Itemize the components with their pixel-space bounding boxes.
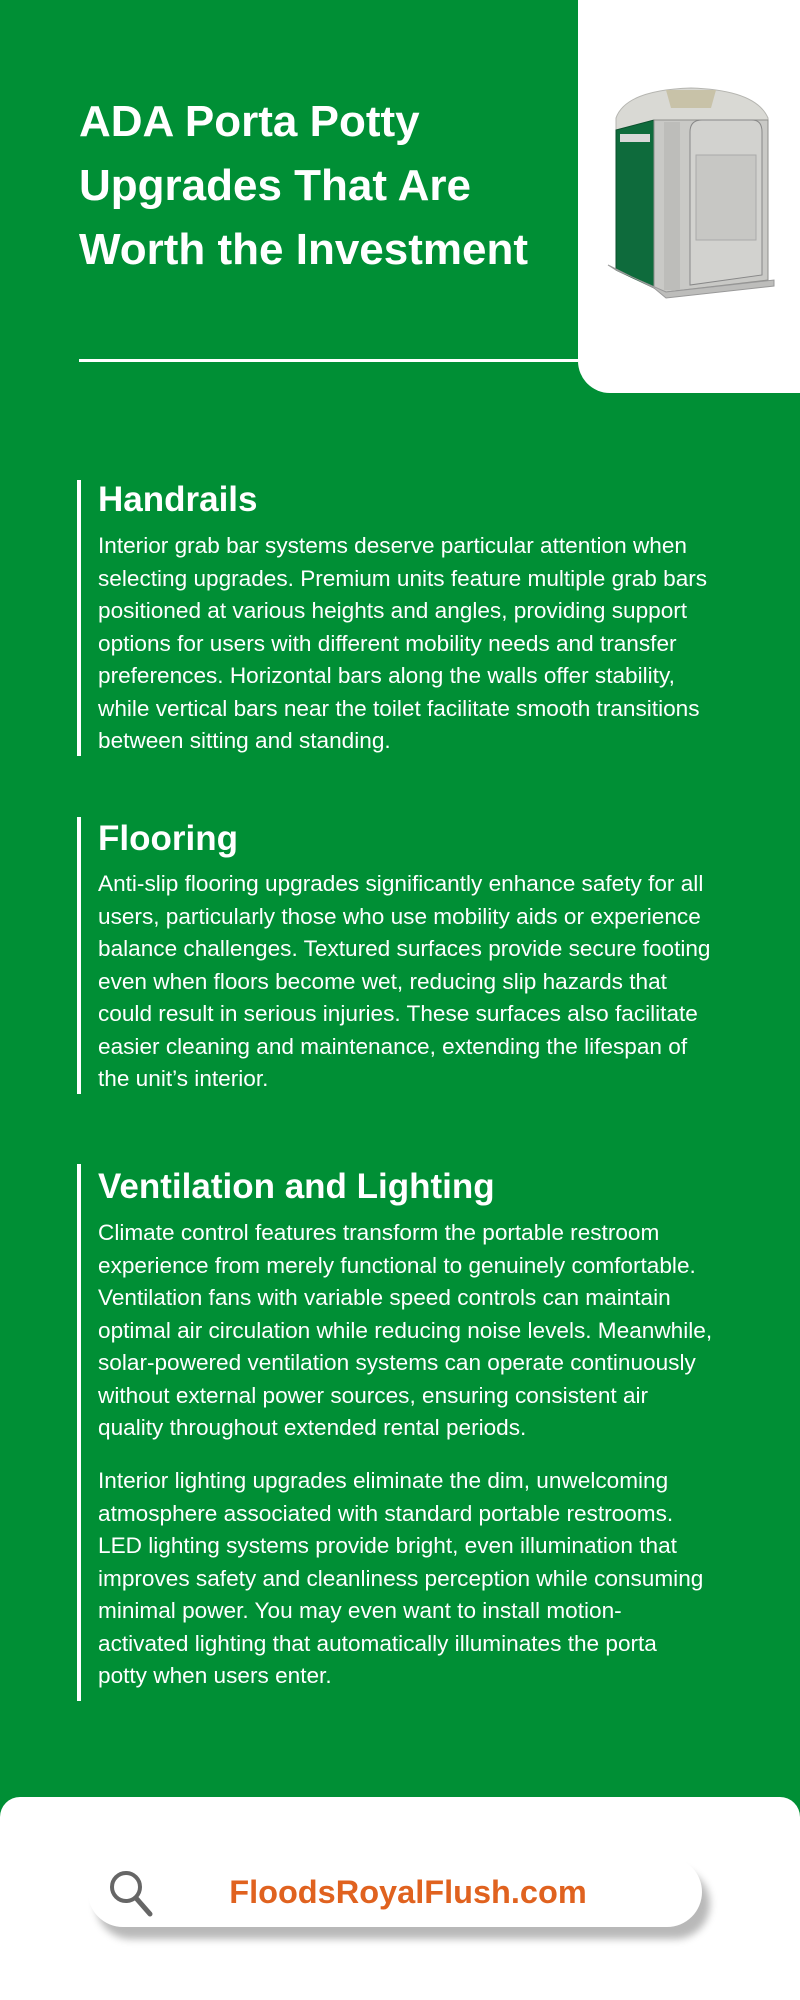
text: handrails body: between sitting and standing. — [98, 728, 391, 753]
text: flooring body: Anti-slip flooring upgrades significantly enhance safety for all — [98, 871, 703, 896]
title — [79, 97, 528, 274]
title: Upgrades That Are — [79, 161, 471, 210]
text: lighting body: atmosphere associated with standard portable restrooms. — [98, 1500, 673, 1526]
title: Worth the Investment — [79, 225, 528, 274]
heading: flooring: Flooring — [98, 819, 238, 858]
text: flooring body — [98, 871, 711, 1091]
text: handrails body: selecting upgrades. Premium units feature multiple grab bars — [98, 566, 707, 590]
text: handrails body: options for users with different mobility needs and transfer — [98, 630, 677, 656]
text: handrails body: positioned at various heights and angles, providing support — [98, 598, 687, 623]
text: lighting body: potty when users enter. — [98, 1663, 332, 1688]
text: handrails body: preferences. Horizontal bars along the walls offer stability, — [98, 663, 675, 688]
heading: ventilation and lighting: Ventilation and Lighting — [98, 1167, 495, 1206]
text: website: FloodsRoyalFlush.com — [229, 1874, 587, 1910]
text: lighting body: Interior lighting upgrades eliminate the dim, unwelcoming — [98, 1468, 668, 1493]
text: flooring body: balance challenges. Textured surfaces provide secure footing — [98, 936, 711, 961]
text: ventilation body: optimal air circulation while reducing noise levels. Meanwhile, — [98, 1318, 712, 1342]
text: ventilation body: Climate control features transform the portable restroom — [98, 1220, 659, 1245]
text: handrails body: while vertical bars near the toilet facilitate smooth transitions — [98, 696, 700, 720]
text: flooring body: easier cleaning and maintenance, extending the lifespan of — [98, 1034, 687, 1058]
text: handrails body: Interior grab bar systems deserve particular attention when — [98, 533, 687, 558]
text: handrails body — [98, 533, 707, 753]
text: ventilation body: without external power sources, ensuring consistent air — [98, 1382, 648, 1408]
panel: image card — [578, 0, 800, 393]
text: ventilation body — [98, 1220, 712, 1440]
title: ADA Porta Potty — [79, 97, 420, 146]
panel: flooring — [77, 817, 711, 1094]
text: lighting body — [98, 1468, 703, 1688]
text: flooring body: even when floors become wet, reducing slip hazards that — [98, 968, 667, 994]
text: lighting body: improves safety and cleanliness perception while consuming — [98, 1566, 703, 1590]
text: lighting body: activated lighting that automatically illuminates the porta — [98, 1630, 657, 1656]
text: ventilation body: experience from merely functional to genuinely comfortable. — [98, 1252, 696, 1278]
text: flooring body: could result in serious injuries. These surfaces also facilitate — [98, 1001, 698, 1026]
text: ventilation body: Ventilation fans with variable speed controls can maintain — [98, 1285, 671, 1310]
heading: handrails: Handrails — [98, 480, 258, 519]
panel: footer — [0, 1797, 800, 2000]
panel: ventilation and lighting — [77, 1164, 712, 1701]
text: ventilation body: quality throughout extended rental periods. — [98, 1415, 526, 1440]
text: lighting body: LED lighting systems provide bright, even illumination that — [98, 1533, 677, 1558]
text: flooring body: the unit’s interior. — [98, 1066, 268, 1091]
text: ventilation body: solar-powered ventilation systems can operate continuously — [98, 1350, 696, 1375]
text: flooring body: users, particularly those who use mobility aids or experience — [98, 904, 701, 928]
panel: handrails — [77, 480, 707, 756]
search pill — [88, 1857, 702, 1927]
icon: ada porta potty — [608, 88, 774, 298]
text: lighting body: minimal power. You may even want to install motion- — [98, 1598, 622, 1623]
icon: magnifier — [110, 1871, 152, 1916]
